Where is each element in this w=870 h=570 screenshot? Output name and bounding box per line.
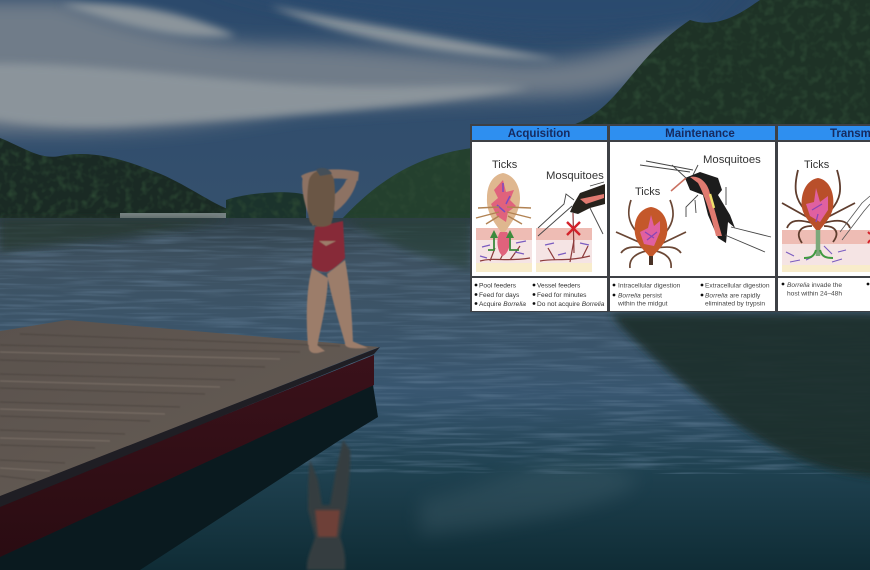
cloud reflection	[420, 463, 640, 535]
dock red side	[0, 355, 374, 557]
water ripples	[0, 224, 870, 474]
text: maintenance bullets	[610, 278, 775, 311]
text: acquisition bullets: Do not acquire Borrelia	[537, 301, 605, 308]
text: maintenance bullets: Borrelia are rapidly	[705, 292, 761, 300]
text: maintenance bullets: eliminated by trypsin	[705, 300, 765, 308]
wooden dock	[0, 320, 380, 557]
text: transmission bullets: Borrelia invade the	[787, 282, 842, 289]
hill reflections	[0, 219, 870, 480]
heading: Acquisition	[472, 126, 607, 140]
panel: maintenance illustration	[610, 142, 775, 276]
dock shadow in water	[0, 385, 378, 570]
heading: Acquisition: Acquisition	[508, 128, 570, 140]
red X blocked feeding	[567, 222, 580, 235]
mosquito vertical	[640, 161, 771, 252]
text: acquisition bullets: Acquire Borrelia	[479, 301, 526, 308]
text: transmission bullets	[778, 278, 870, 311]
panel: transmission illustration: Ticks	[804, 159, 830, 171]
panel: transmission illustration	[778, 142, 870, 276]
text: maintenance bullets: Intracellular digestion	[618, 282, 681, 290]
clouds in the sky	[0, 0, 740, 133]
skin block under tick	[476, 228, 532, 272]
text: acquisition bullets: Pool feeders	[479, 282, 517, 290]
water surface	[0, 218, 870, 570]
panel: acquisition illustration: Ticks	[492, 159, 518, 171]
heading: Maintenance	[610, 126, 775, 140]
heading: Transmission	[778, 126, 870, 140]
tick with midgut pathogens	[616, 200, 686, 268]
feeding tick	[782, 170, 855, 258]
text: maintenance bullets: Extracellular digestion	[705, 282, 770, 290]
text: maintenance bullets: within the midgut	[617, 300, 668, 308]
tick engorged with pathogens	[476, 173, 531, 256]
woman reflection	[307, 440, 350, 570]
mosquito feeding	[538, 182, 605, 253]
text: acquisition bullets: Vessel feeders	[537, 282, 581, 290]
wooded hills right	[342, 0, 870, 220]
column: Transmission (cropped)	[778, 126, 870, 311]
text: acquisition bullets: Feed for minutes	[537, 292, 587, 299]
panel: maintenance illustration: Mosquitoes	[703, 154, 761, 166]
text: acquisition bullets	[472, 278, 607, 311]
column: Maintenance	[610, 126, 775, 311]
heading: Transmission: Transm	[830, 128, 870, 140]
text: acquisition bullets: Feed for days	[479, 292, 520, 299]
woman in red swimsuit	[301, 168, 368, 353]
panel: maintenance illustration: Ticks	[635, 186, 661, 198]
red X cropped	[868, 232, 870, 243]
text: transmission bullets: host within 24–48h	[787, 290, 842, 298]
panel: acquisition illustration: Mosquitoes	[546, 170, 604, 182]
dock edge	[0, 347, 380, 507]
distant hills left	[0, 138, 306, 219]
text: maintenance bullets: Borrelia persist	[618, 292, 662, 300]
swimsuit reflection	[315, 510, 340, 537]
mosquito legs cropped	[840, 196, 870, 240]
infographic: ticks and mosquitoes	[470, 124, 870, 312]
panel: acquisition illustration	[472, 142, 607, 276]
skin block under mosquito	[536, 228, 592, 272]
column: Acquisition	[472, 126, 607, 311]
heading: Maintenance: Maintenance	[665, 128, 735, 140]
skin block	[782, 230, 870, 272]
